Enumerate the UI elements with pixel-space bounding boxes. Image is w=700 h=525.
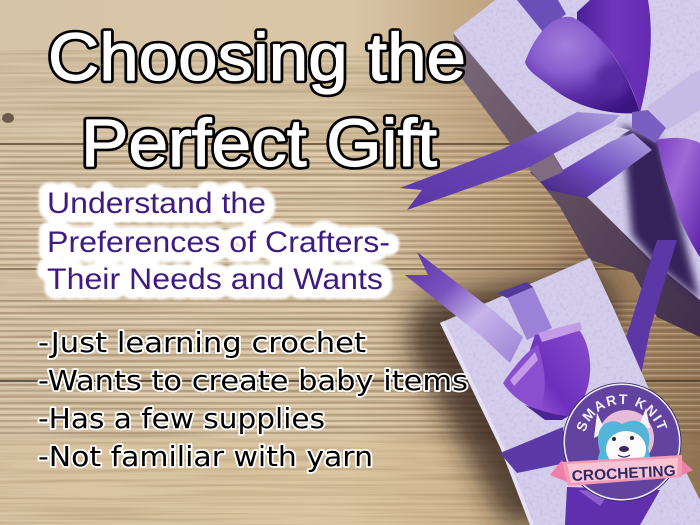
subtitle glow [47, 187, 390, 296]
subtitle text: Preferences of Crafters- [47, 226, 390, 259]
logo badge: Smart Knit Crocheting [550, 382, 693, 502]
list text: -Has a few supplies [38, 402, 325, 435]
lower gift upright band shade [497, 282, 533, 298]
banner with name: CROCHETING [571, 463, 676, 485]
bow: upper [525, 0, 700, 257]
title outline: Choosing the [48, 20, 466, 95]
llama mascot [594, 408, 654, 467]
list halo: -Wants to create baby items [38, 364, 468, 397]
ribbon tail: upper left [400, 112, 620, 210]
subtitle glow: Their Needs and Wants [47, 263, 383, 296]
lower bow knot shade [525, 405, 570, 420]
lower gift cross band [500, 427, 566, 473]
upper gift cross ribbon right [647, 70, 700, 130]
list halo: -Not familiar with yarn [38, 440, 373, 473]
bow: lower [503, 322, 590, 420]
long ribbon strand [612, 240, 677, 380]
subtitle with white glow [47, 187, 390, 296]
upper gift vertical ribbon band [517, 0, 566, 32]
lower gift upright band [507, 287, 552, 340]
banner with name [550, 455, 693, 486]
upper gift top face [453, 0, 700, 300]
upper gift paper strip [553, 127, 630, 170]
subtitle text: Their Needs and Wants [47, 263, 383, 296]
title fill: Perfect Gift [81, 106, 437, 181]
bow loop right [657, 138, 700, 257]
badge arc text: SMART KNIT [577, 394, 668, 432]
lower bow main loop [520, 325, 590, 418]
crafter needs list [38, 326, 468, 473]
lower gift top face [440, 258, 700, 525]
title outline [48, 20, 466, 181]
bow knot [632, 110, 666, 143]
lower bow front fold [503, 345, 545, 412]
subtitle text [47, 187, 390, 296]
list halo: -Just learning crochet [38, 326, 366, 359]
list text: -Just learning crochet [38, 326, 366, 359]
shaded strip side [528, 154, 563, 182]
bottom ribbon under badge [565, 487, 660, 525]
gift shadows on wood [405, 75, 620, 525]
list text: -Not familiar with yarn [38, 440, 373, 473]
bow loop left [525, 17, 640, 113]
title fill [48, 20, 466, 181]
lower gift left edge [440, 321, 534, 525]
subtitle text: Understand the [47, 187, 266, 220]
list halo: -Has a few supplies [38, 402, 325, 435]
list text: -Wants to create baby items [38, 364, 468, 397]
list text [38, 326, 468, 473]
title fill: Choosing the [48, 20, 466, 95]
title outline: Perfect Gift [81, 106, 437, 181]
upper gift shadow below knot [622, 125, 700, 300]
subtitle glow: Preferences of Crafters- [47, 226, 390, 259]
title [48, 20, 466, 181]
badge disc [564, 384, 680, 500]
bow loop top right [577, 0, 651, 113]
upper gift side face [453, 33, 700, 337]
upper gift cross ribbon lower left [530, 133, 652, 198]
gift box: upper [453, 0, 700, 337]
ribbon tail: lower left [405, 252, 523, 363]
list halo [38, 326, 468, 473]
gift box: lower [440, 258, 700, 525]
subtitle glow: Understand the [47, 187, 266, 220]
